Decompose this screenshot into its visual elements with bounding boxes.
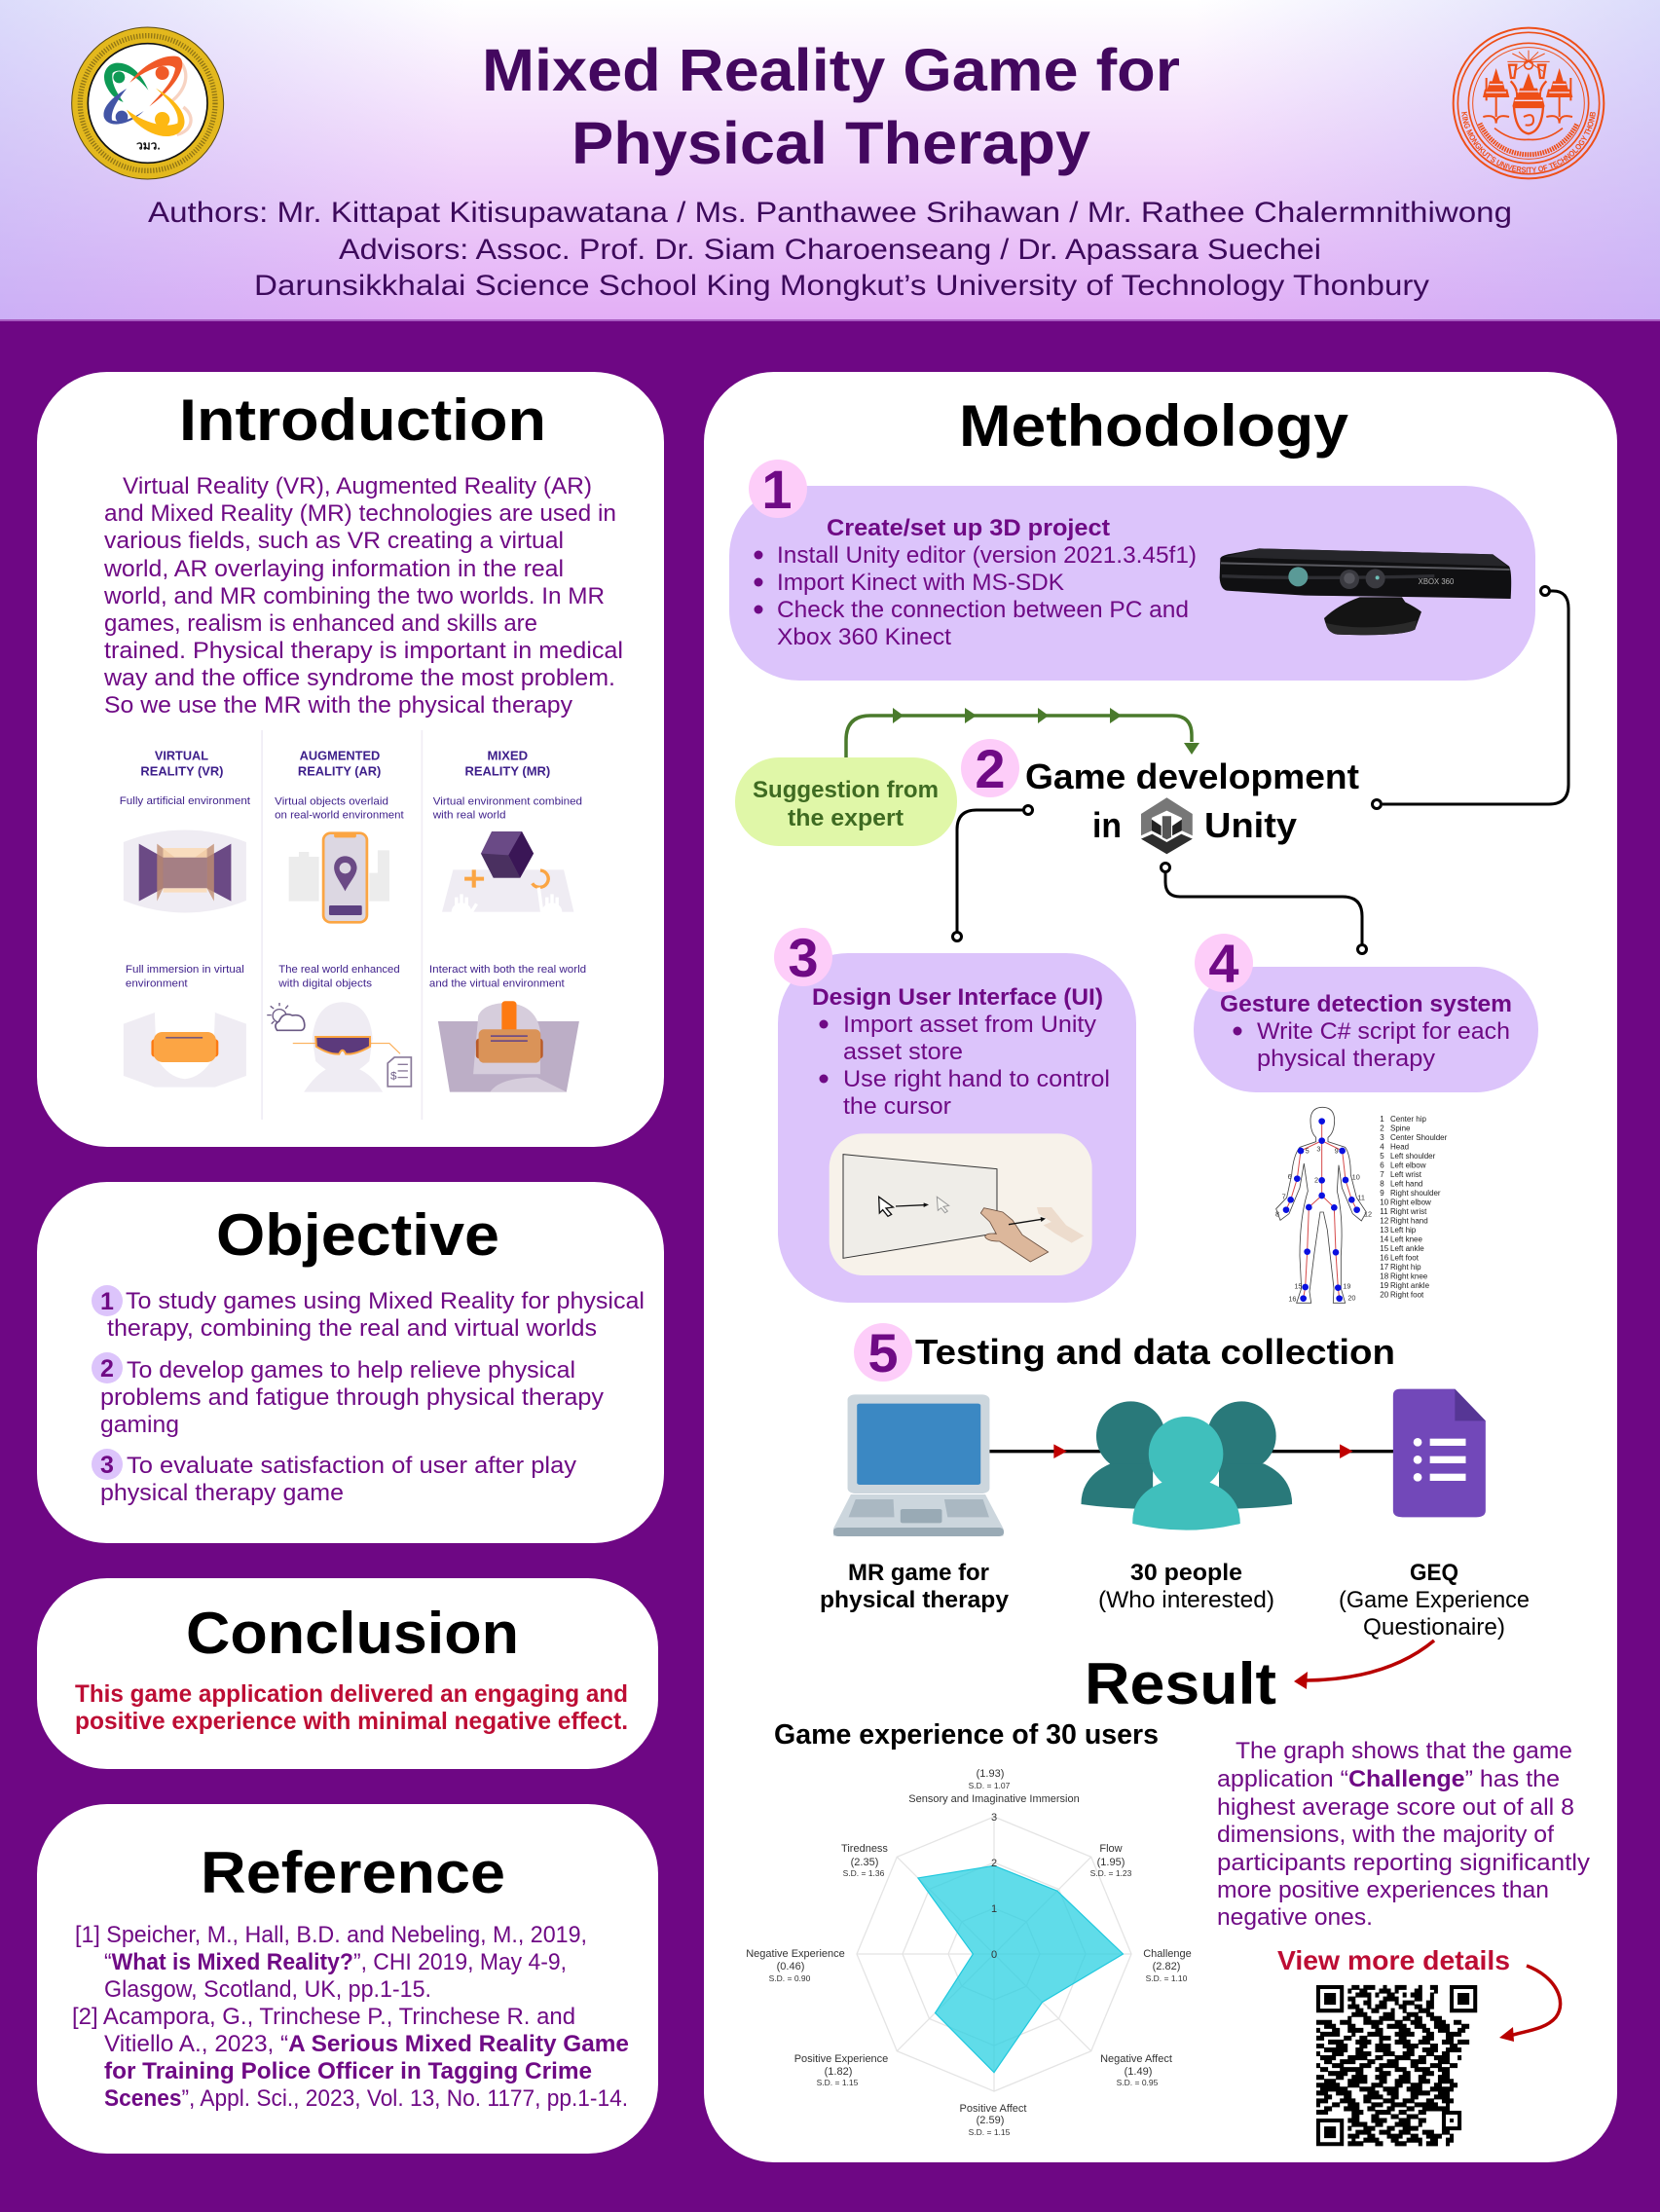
text: introduction paragraph — [103, 473, 623, 719]
text: introduction paragraph: and Mixed Reality (MR) technologies are used in — [104, 500, 616, 527]
logo: university seal right: KING MONGKUT'S UNIVERSITY OF TECHNOLOGY THONBURI — [1461, 111, 1596, 173]
diagram: body skeleton joints: Left elbow — [1390, 1161, 1426, 1170]
text: reference list: Vitiello A., 2023, “A Serious Mixed Reality Game — [104, 2031, 629, 2057]
diagram: body skeleton joints: 8 — [1275, 1209, 1279, 1218]
text: introduction paragraph: various fields, such as VR creating a virtual — [104, 528, 564, 554]
diagram: body skeleton joints: Right hip — [1390, 1263, 1421, 1272]
panel: introduction — [37, 372, 664, 1147]
step 3: design user interface: Design User Interface (UI) — [812, 984, 1103, 1011]
heading: result: Result — [1085, 1651, 1276, 1716]
text: introduction paragraph: world, AR overlaying information in the real — [103, 556, 564, 582]
flow: laptop to people to questionnaire — [833, 1389, 1486, 1536]
callout: suggestion from the expert — [735, 757, 957, 846]
chart: VR AR MR comparison illustration: on real-world environment — [275, 810, 405, 822]
connector: step 2 to step 4 — [1161, 863, 1367, 954]
panel: conclusion — [37, 1578, 658, 1769]
diagram: body skeleton joints: Head — [1390, 1143, 1409, 1151]
text: result explanation — [1217, 1738, 1590, 1931]
chart: radar of game experience dimensions: S.D. = 1.15 — [817, 2078, 859, 2087]
diagram: body skeleton joints: 4 — [1380, 1143, 1384, 1151]
diagram: body skeleton joints: 16 — [1380, 1254, 1389, 1262]
text: introduction paragraph: So we use the MR with the physical therapy — [104, 692, 572, 719]
step 1: create project: 1 — [761, 459, 793, 520]
chart: VR AR MR comparison illustration: Full immersion in virtual — [126, 964, 244, 976]
text: reference list: “What is Mixed Reality?”, CHI 2019, May 4-9, — [104, 1949, 567, 1975]
chart: radar of game experience dimensions: S.D. = 1.15 — [969, 2127, 1011, 2137]
text: reference list: [1] Speicher, M., Hall, B.D. and Nebeling, M., 2019, — [75, 1922, 587, 1948]
chart: radar of game experience dimensions: S.D. = 1.07 — [969, 1781, 1011, 1790]
arrow: expert suggestion to game development — [846, 708, 1199, 757]
label: MR game: MR game for — [848, 1560, 989, 1586]
diagram: body skeleton joints: 13 — [1380, 1226, 1389, 1235]
diagram: body skeleton joints: Left hip — [1390, 1226, 1417, 1235]
diagram: body skeleton joints: 19 — [1380, 1281, 1389, 1290]
chart: radar of game experience dimensions: (1.95) — [1097, 1857, 1125, 1868]
authors and advisors: Darunsikkhalai Science School King Mongkut’s University of Technology Thonbury — [254, 270, 1429, 302]
chart: radar of game experience dimensions: (0.46) — [777, 1961, 804, 1972]
arrow: details to QR code — [1499, 1966, 1561, 2042]
objective item 2: gaming — [100, 1412, 179, 1438]
text: result explanation: application “Challenge” has the — [1217, 1766, 1560, 1792]
authors and advisors: Authors: Mr. Kittapat Kitisupawatana / Ms. Panthawee Srihawan / Mr. Rathee Chalermnithiwong — [148, 197, 1512, 229]
chart: radar of game experience dimensions: 2 — [991, 1858, 997, 1869]
chart: radar of game experience dimensions: Positive Experience — [794, 2053, 888, 2065]
title: Physical Therapy — [572, 110, 1090, 176]
chart: radar of game experience dimensions: S.D. = 1.36 — [843, 1868, 885, 1878]
text: result explanation: highest average score out of all 8 — [1217, 1794, 1574, 1821]
text: reference list: [2] Acampora, G., Trinchese P., Trinchese R. and — [72, 2004, 575, 2030]
chart: VR AR MR comparison illustration: MIXED — [488, 749, 528, 763]
text: result explanation: participants reporting significantly — [1217, 1850, 1590, 1876]
heading: introduction: Introduction — [179, 387, 546, 453]
text: introduction paragraph: trained. Physical therapy is important in medical — [104, 638, 623, 664]
text: reference list — [72, 1922, 629, 2112]
diagram: body skeleton joints: 17 — [1380, 1263, 1389, 1272]
callout: suggestion from the expert: the expert — [788, 805, 904, 831]
connector: step 2 to step 3 — [952, 806, 1032, 940]
heading: methodology: Methodology — [959, 393, 1349, 459]
chart: VR AR MR comparison illustration — [120, 730, 586, 1120]
objective item 3: To evaluate satisfaction of user after play — [127, 1453, 576, 1479]
chart: radar of game experience dimensions: 0 — [991, 1949, 997, 1961]
step 1: create project — [729, 459, 1535, 681]
chart: VR AR MR comparison illustration: REALITY (MR) — [464, 764, 550, 779]
diagram: body skeleton joints: Right foot — [1390, 1291, 1424, 1299]
text: reference list: for Training Police Officer in Tagging Crime — [104, 2058, 592, 2084]
objective item 2: To develop games to help relieve physical — [127, 1357, 575, 1383]
chart: VR AR MR comparison illustration: REALITY (AR) — [298, 764, 381, 779]
diagram: body skeleton joints: 11 — [1380, 1207, 1388, 1216]
icon: Kinect sensor — [1220, 548, 1511, 635]
heading: conclusion: Conclusion — [186, 1601, 519, 1666]
chart: radar of game experience dimensions: S.D. = 0.95 — [1117, 2078, 1159, 2087]
title — [482, 37, 1180, 176]
chart: radar of game experience dimensions: Sensory and Imaginative Immersion — [908, 1793, 1080, 1805]
step 4: gesture detection system: physical therapy — [1257, 1046, 1435, 1072]
diagram: body skeleton joints: 10 — [1380, 1198, 1389, 1207]
chart: radar of game experience dimensions: Tiredness — [841, 1843, 888, 1855]
objective item 3 — [92, 1449, 576, 1506]
label: GEQ: (Game Experience — [1339, 1587, 1530, 1613]
text: introduction paragraph: games, realism is enhanced and skills are — [104, 610, 537, 637]
arrow: laptop to people — [989, 1444, 1101, 1458]
chart: radar of game experience dimensions: (2.82) — [1153, 1961, 1180, 1972]
diagram: body skeleton joints: 5 — [1380, 1152, 1384, 1161]
text: conclusion statement: positive experience with minimal negative effect. — [75, 1708, 628, 1735]
step 2: game development in Unity: 2 — [975, 738, 1006, 799]
diagram: body skeleton joints: Left hand — [1390, 1180, 1422, 1188]
authors and advisors: Advisors: Assoc. Prof. Dr. Siam Charoenseang / Dr. Apassara Suechei — [339, 234, 1321, 266]
chart: VR AR MR comparison illustration: Interact with both the real world — [429, 964, 586, 976]
title: Mixed Reality Game for — [482, 37, 1180, 103]
step 4: gesture detection system: Write C# script for each — [1257, 1018, 1510, 1045]
diagram: body skeleton joints: Right ankle — [1390, 1281, 1430, 1290]
step 3: design user interface — [774, 927, 1136, 1303]
chart: radar of game experience dimensions — [746, 1768, 1192, 2137]
diagram: body skeleton joints: 6 — [1288, 1172, 1292, 1181]
chart: radar of game experience dimensions: (2.35) — [851, 1857, 878, 1868]
objective item 2 — [92, 1352, 604, 1438]
chart: radar of game experience dimensions: (1.82) — [825, 2066, 852, 2078]
chart: VR AR MR comparison illustration: REALITY (VR) — [140, 764, 223, 779]
objective item 1: 1 — [100, 1288, 114, 1315]
step 1: create project: Install Unity editor (version 2021.3.45f1) — [777, 542, 1197, 569]
objective item 3: 3 — [100, 1452, 114, 1479]
chart: VR AR MR comparison illustration: with real world — [432, 810, 505, 822]
text: conclusion statement — [75, 1680, 628, 1735]
diagram: body skeleton joints: 15 — [1294, 1281, 1302, 1290]
chart: radar of game experience dimensions: (1.49) — [1125, 2066, 1152, 2078]
objective item 2: 2 — [100, 1355, 114, 1382]
diagram: body skeleton joints: 9 — [1335, 1146, 1339, 1155]
text: introduction paragraph: way and the office syndrome the most problem. — [103, 665, 615, 691]
icon: Unity logo — [1141, 797, 1193, 854]
icon: Kinect sensor: XBOX 360 — [1419, 577, 1455, 586]
diagram: body skeleton joints: 11 — [1357, 1193, 1365, 1201]
chart: radar of game experience dimensions: Flow — [1099, 1843, 1123, 1855]
panel: methodology — [704, 372, 1617, 2162]
chart: VR AR MR comparison illustration: environment — [126, 977, 189, 989]
diagram: body skeleton joints: 15 — [1380, 1244, 1389, 1253]
diagram: body skeleton joints: Center Shoulder — [1390, 1133, 1448, 1142]
chart: radar of game experience dimensions: Negative Affect — [1100, 2053, 1172, 2065]
diagram: body skeleton joints: 19 — [1343, 1281, 1350, 1290]
diagram: body skeleton joints: Right knee — [1390, 1272, 1428, 1281]
step 2: game development in Unity: Unity — [1204, 805, 1297, 845]
label: 30 people: (Who interested) — [1098, 1587, 1274, 1613]
diagram: body skeleton joints: Spine — [1390, 1124, 1411, 1133]
diagram: body skeleton joints: 5 — [1306, 1146, 1310, 1155]
chart: radar of game experience dimensions: (1.93) — [977, 1768, 1004, 1780]
chart: radar of game experience dimensions: Negative Experience — [746, 1948, 845, 1960]
label: GEQ: Questionaire) — [1363, 1614, 1505, 1641]
diagram: body skeleton joints — [1275, 1107, 1448, 1303]
heading: objective: Objective — [216, 1202, 499, 1268]
diagram: body skeleton joints: 2 — [1314, 1176, 1318, 1185]
diagram: body skeleton joints: 3 — [1316, 1145, 1320, 1154]
label: MR game: physical therapy — [820, 1587, 1010, 1613]
diagram: body skeleton joints: Right hand — [1390, 1217, 1428, 1225]
logo: school emblem left — [72, 27, 224, 179]
chart: VR AR MR comparison illustration: Virtual environment combined — [433, 795, 582, 807]
step 3: design user interface: the cursor — [843, 1093, 951, 1120]
diagram: body skeleton joints: 18 — [1380, 1272, 1389, 1281]
diagram: body skeleton joints: 2 — [1380, 1124, 1384, 1133]
QR code — [1316, 1985, 1477, 2146]
callout: view more details: View more details — [1277, 1945, 1510, 1975]
chart: radar of game experience dimensions: S.D. = 1.10 — [1146, 1973, 1188, 1983]
step 1: create project: Check the connection between PC and — [777, 597, 1189, 623]
diagram: body skeleton joints: Right elbow — [1390, 1198, 1431, 1207]
diagram: body skeleton joints: Right shoulder — [1390, 1189, 1441, 1198]
arrow: people to form — [1271, 1444, 1393, 1458]
text: introduction paragraph: Virtual Reality (VR), Augmented Reality (AR) — [123, 473, 592, 499]
objective item 1 — [92, 1285, 645, 1342]
diagram: body skeleton joints: 14 — [1380, 1235, 1389, 1244]
objective item 2: problems and fatigue through physical therapy — [100, 1384, 604, 1411]
header band — [0, 0, 1660, 321]
label: 30 people — [1098, 1560, 1274, 1613]
diagram: body skeleton joints: Left knee — [1390, 1235, 1422, 1244]
arrow: GEQ to result — [1294, 1641, 1434, 1689]
icon: laptop — [833, 1394, 1004, 1536]
chart: radar of game experience dimensions: (2.59) — [977, 2115, 1004, 2126]
step 1: create project: Xbox 360 Kinect — [777, 624, 951, 650]
panel: reference — [37, 1804, 658, 2154]
diagram: body skeleton joints: 1 — [1380, 1115, 1384, 1124]
step 5: testing and data collection heading: 5 — [867, 1322, 899, 1383]
diagram: body skeleton joints: 9 — [1380, 1189, 1384, 1198]
authors and advisors — [148, 197, 1512, 302]
connector: step 1 to step 2 — [1373, 586, 1568, 808]
diagram: body skeleton joints: Center hip — [1390, 1115, 1426, 1124]
step 2: game development in Unity: Game development — [1025, 756, 1359, 796]
chart: radar of game experience dimensions: S.D. = 0.90 — [769, 1973, 811, 1983]
chart: VR AR MR comparison illustration: AUGMENTED — [300, 749, 380, 763]
diagram: body skeleton joints: 12 — [1380, 1217, 1389, 1225]
step 5: testing and data collection heading: Testing and data collection — [915, 1332, 1395, 1372]
chart: VR AR MR comparison illustration: The real world enhanced — [278, 964, 400, 976]
panel: objective — [37, 1182, 664, 1543]
step 4: gesture detection system: Gesture detection system — [1220, 991, 1512, 1017]
chart: radar of game experience dimensions: Challenge — [1143, 1948, 1192, 1960]
text: result explanation: The graph shows that the game — [1236, 1738, 1572, 1764]
diagram: body skeleton joints: Left foot — [1390, 1254, 1420, 1262]
step 2: game development in Unity: in — [1092, 805, 1122, 845]
icon: Google Forms document — [1393, 1389, 1486, 1517]
diagram: body skeleton joints: Right wrist — [1390, 1207, 1427, 1216]
chart: VR AR MR comparison illustration: Virtual objects overlaid — [275, 795, 388, 807]
label: 30 people: 30 people — [1130, 1560, 1242, 1586]
step 4: gesture detection system: 4 — [1208, 933, 1239, 994]
diagram: body skeleton joints: 20 — [1347, 1294, 1355, 1303]
chart: radar of game experience dimensions: 3 — [991, 1812, 997, 1824]
step 4: gesture detection system — [1194, 933, 1538, 1092]
label: MR game — [820, 1560, 1010, 1613]
diagram: body skeleton joints: Left wrist — [1390, 1170, 1422, 1179]
diagram: body skeleton joints: Left ankle — [1390, 1244, 1424, 1253]
step 2: game development in Unity — [961, 738, 1359, 854]
label: GEQ — [1339, 1560, 1530, 1641]
text: result explanation: dimensions, with the majority of — [1217, 1822, 1554, 1848]
text: reference list: Scenes”, Appl. Sci., 2023, Vol. 13, No. 1177, pp.1-14. — [104, 2085, 628, 2112]
diagram: body skeleton joints: 16 — [1288, 1294, 1296, 1303]
heading: game experience chart: Game experience of 30 users — [774, 1719, 1159, 1751]
text: result explanation: negative ones. — [1217, 1904, 1373, 1931]
text: result explanation: more positive experiences than — [1217, 1877, 1549, 1903]
chart: radar of game experience dimensions: S.D. = 1.23 — [1090, 1868, 1132, 1878]
diagram: body skeleton joints: Left shoulder — [1390, 1152, 1436, 1161]
label: GEQ: GEQ — [1410, 1560, 1458, 1586]
diagram: body skeleton joints: 20 — [1380, 1291, 1389, 1299]
step 3: design user interface: Use right hand to control — [843, 1066, 1110, 1092]
logo: school emblem left: วมว. — [136, 138, 161, 152]
diagram: body skeleton joints: 12 — [1364, 1209, 1372, 1218]
objective item 1: therapy, combining the real and virtual worlds — [107, 1315, 597, 1342]
heading: reference: Reference — [201, 1840, 505, 1905]
chart: VR AR MR comparison illustration: and the virtual environment — [429, 977, 566, 989]
step 1: create project: Create/set up 3D project — [827, 515, 1110, 541]
objective item 3: physical therapy game — [100, 1480, 344, 1506]
diagram: body skeleton joints: 8 — [1380, 1180, 1384, 1188]
text: introduction paragraph: world, and MR combining the two worlds. In MR — [103, 583, 605, 609]
chart: VR AR MR comparison illustration: $ — [390, 1070, 397, 1082]
step 5: testing and data collection heading — [854, 1322, 1395, 1383]
step 3: design user interface: 3 — [788, 927, 819, 988]
chart: VR AR MR comparison illustration: with digital objects — [277, 977, 372, 989]
step 3: design user interface: Import asset from Unity — [843, 1012, 1096, 1038]
step 1: create project: Import Kinect with MS-SDK — [777, 570, 1064, 596]
illustration: hand moving cursor — [830, 1133, 1092, 1275]
chart: VR AR MR comparison illustration: Fully artificial environment — [120, 795, 251, 807]
objective item 1: To study games using Mixed Reality for physical — [126, 1288, 645, 1314]
chart: radar of game experience dimensions: 1 — [991, 1903, 997, 1915]
chart: VR AR MR comparison illustration: VIRTUAL — [155, 749, 208, 763]
diagram: body skeleton joints: 3 — [1380, 1133, 1384, 1142]
text: conclusion statement: This game application delivered an engaging and — [75, 1680, 628, 1708]
diagram: body skeleton joints: 6 — [1380, 1161, 1384, 1170]
chart: radar of game experience dimensions: Positive Affect — [960, 2103, 1026, 2115]
step 3: design user interface: asset store — [843, 1039, 963, 1065]
diagram: body skeleton joints: 10 — [1352, 1173, 1360, 1182]
diagram: body skeleton joints: 7 — [1380, 1170, 1384, 1179]
callout: suggestion from the expert: Suggestion from — [753, 777, 939, 803]
text: reference list: Glasgow, Scotland, UK, pp.1-15. — [104, 1976, 431, 2003]
diagram: body skeleton joints: 7 — [1282, 1193, 1286, 1201]
icon: group of people — [1081, 1401, 1292, 1530]
